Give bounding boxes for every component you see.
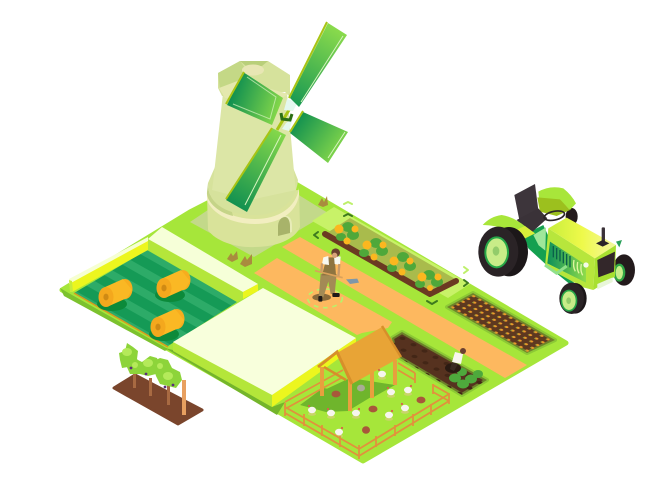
hood and engine side: [545, 218, 616, 290]
windmill pad: [190, 173, 328, 257]
left fender: [483, 215, 535, 243]
posts: [320, 360, 397, 411]
bale 2: [155, 270, 190, 302]
tower body: [212, 93, 296, 200]
vines: [119, 343, 182, 405]
vineyard plot: [114, 343, 202, 424]
light tile behind pumpkin plot: [312, 207, 470, 298]
vegetable soil plot: [392, 332, 487, 395]
field walls: [69, 227, 258, 302]
front axle: [545, 265, 567, 273]
stake: [182, 380, 186, 415]
front fence: [285, 373, 449, 459]
exhaust: [596, 227, 622, 247]
blade: left: [226, 72, 283, 125]
far wheels: [566, 208, 635, 286]
chassis: [523, 225, 585, 292]
blade: right: [290, 111, 348, 163]
hub and panels: [277, 99, 298, 131]
seat: [514, 184, 547, 233]
tower base: [207, 160, 300, 247]
bale 1: [97, 279, 132, 311]
chickens: [308, 369, 426, 438]
blade: bottom left: [226, 128, 286, 212]
block shadow: [165, 348, 285, 415]
grass tufts: [227, 196, 328, 267]
footpaths: [254, 237, 527, 378]
roof: [318, 326, 401, 385]
door: [278, 216, 292, 236]
hay bales: [97, 270, 190, 341]
barn shadow: [300, 388, 376, 412]
gardener with lettuces: [445, 348, 483, 388]
chicken coop yard: [285, 326, 449, 459]
back fence: [285, 363, 449, 409]
windmill: [207, 22, 348, 247]
bale 3: [149, 309, 184, 341]
crop row markers: [314, 202, 468, 304]
rear wheel: [478, 227, 528, 277]
farmer with shovel: [308, 248, 359, 308]
right fender: [537, 187, 576, 216]
hay field: [69, 227, 258, 347]
ground base: [60, 170, 566, 461]
front face: [593, 245, 616, 290]
raised cream plot: [173, 288, 356, 407]
steering wheel: [543, 209, 565, 222]
tractor: [478, 184, 635, 314]
pumpkin plot: [325, 218, 457, 296]
carrot plot: [447, 293, 555, 353]
cap: [218, 61, 290, 98]
blade: top right: [289, 22, 347, 107]
front wheel: [559, 283, 587, 314]
